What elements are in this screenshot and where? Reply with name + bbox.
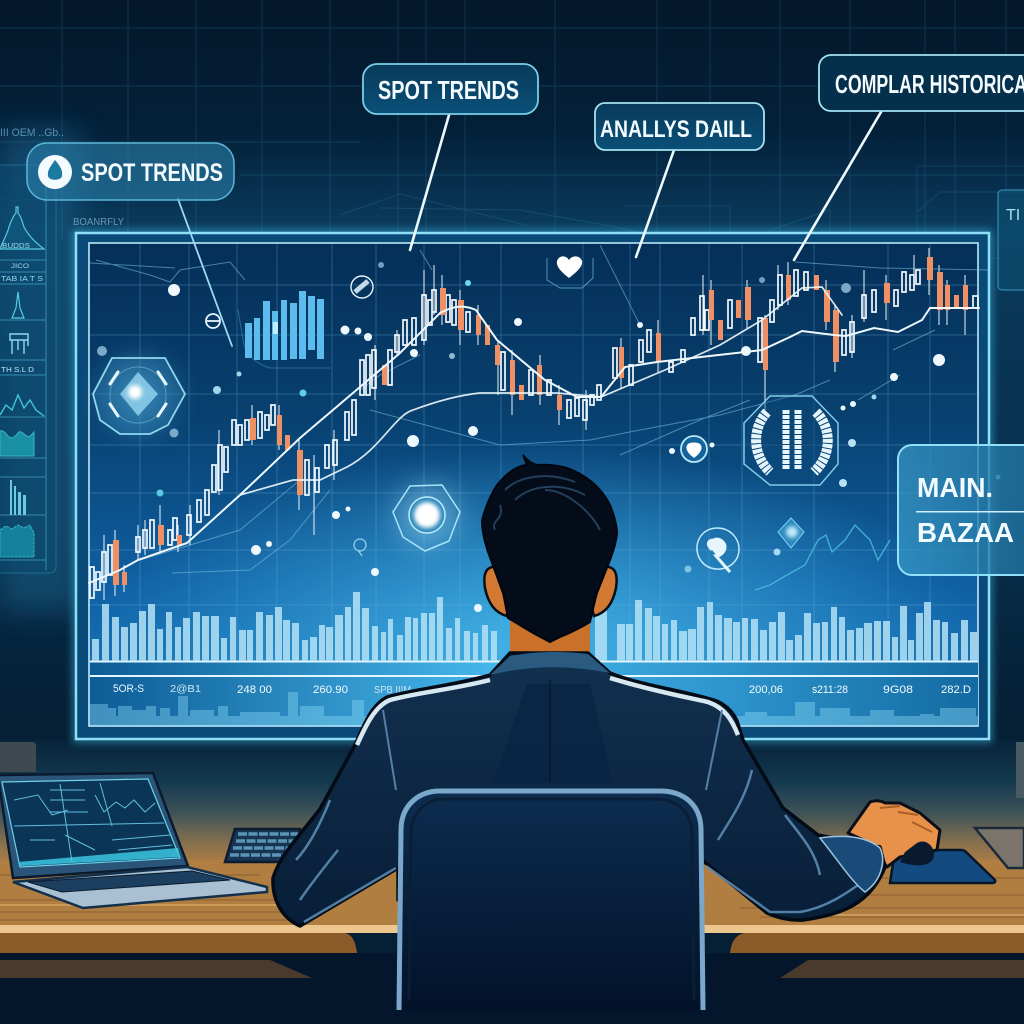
pixel activity blocks (90, 692, 978, 726)
sleeve seams (383, 710, 722, 790)
panel: left side data column (0, 165, 56, 573)
sleeve highlights (296, 770, 872, 922)
wall fixture left (0, 742, 36, 772)
person: neck and ears (484, 567, 617, 660)
axis rules (90, 662, 978, 676)
callout text: SPOT TRENDS (378, 75, 519, 105)
icon: large hexagon emblem (93, 358, 185, 434)
icon: small chain marker (354, 539, 366, 556)
laptop base (13, 867, 267, 908)
icon: laptop (0, 773, 267, 908)
chart grid (89, 243, 978, 661)
person: chair back (398, 789, 704, 1010)
axis label: SPB IIIM (374, 685, 411, 696)
chart: secondary thin indicator lines (90, 245, 990, 573)
person: hand on mouse (848, 801, 940, 867)
label: top-left caption: III OEM ..Gb.. (0, 127, 64, 139)
callout: analysis daily (595, 103, 764, 150)
icon: mini bar chart (10, 480, 26, 515)
wall below the screen (0, 740, 1024, 861)
lower trend line (240, 287, 842, 495)
icon: glowing pin (778, 518, 804, 548)
area below desk (0, 953, 1024, 1024)
chair outer rim (399, 791, 703, 1010)
axis label: 9G08 (883, 684, 913, 696)
callout text: MAIN. (917, 472, 993, 503)
icon: glowing octagon (393, 485, 460, 551)
tag text: TI (1006, 207, 1020, 224)
icon: ornate teal chart (0, 525, 34, 557)
outer frame (76, 233, 989, 739)
panel: main trading screen (76, 233, 989, 739)
icon: desk keyboard (225, 829, 300, 862)
icon: spire (12, 292, 24, 318)
bar chart: mini blue bars (238, 291, 330, 368)
laptop screen bar (18, 848, 180, 866)
left wall glow (0, 130, 80, 610)
jacket centre panel (493, 684, 613, 783)
label: side value: TH S.L D (1, 367, 34, 374)
label: column row: TAB IA T S (1, 276, 43, 283)
icon: temple base label: BUDDS (2, 243, 30, 250)
chart: white candles (90, 270, 978, 598)
callout text: ANALLYS DAILL (600, 116, 752, 143)
background grid lines (0, 0, 1024, 270)
label: column heading: JICO (11, 263, 29, 270)
inner frame (89, 243, 978, 726)
axis label: s211:28 (812, 684, 848, 696)
lower desk rail left (0, 960, 312, 978)
axis label: 260.90 (313, 684, 348, 696)
hand fingers (880, 806, 932, 832)
callout: spot trends (363, 64, 538, 114)
icon: small badge (351, 276, 373, 298)
label: board caption: BOANRFLY (73, 217, 124, 228)
collar (490, 652, 610, 675)
person: suit body (273, 652, 885, 926)
panel: axis band (90, 662, 978, 726)
screen frame glow (76, 233, 989, 739)
arrow: callout leaders (178, 112, 881, 346)
desk underside (0, 933, 1024, 953)
chart area glow (89, 320, 978, 726)
icon: mouse pad (890, 850, 995, 883)
icon: block building (10, 334, 28, 354)
chart area background (89, 243, 978, 726)
chart: faded teal sparkline (755, 525, 890, 590)
axis label: 248 00 (237, 684, 272, 696)
shoulder highlights (357, 678, 738, 745)
icon: small ring at top left of chart (206, 314, 220, 328)
panel: main bazaar callout (898, 445, 1024, 575)
wall fixture right (1016, 742, 1024, 798)
callout: compare historical (819, 55, 1024, 111)
icon: mountain chart (0, 395, 44, 416)
jacket back seam (549, 680, 551, 783)
axis label: 2@B1 (170, 684, 201, 695)
icon: ring with drop (681, 436, 707, 462)
mouse (900, 841, 934, 865)
left panel rules (0, 170, 46, 570)
icon: temple with statue (0, 207, 44, 249)
laptop lid (0, 773, 188, 878)
lower desk rail right (780, 960, 1024, 978)
chair inner rim (409, 799, 694, 1000)
laptop keyboard (28, 871, 230, 892)
person: hair (482, 455, 617, 642)
chart: orange candles (113, 257, 968, 585)
panel: right edge tag (998, 190, 1024, 290)
bar chart: volume (92, 592, 977, 661)
desk front edge (0, 925, 1024, 933)
icon: drop in white circle (38, 155, 72, 189)
icon: heart (547, 256, 593, 288)
callout text: SPOT TRENDS (81, 159, 223, 187)
icon: paper on desk (975, 828, 1024, 868)
callout: spot trends with icon (27, 143, 234, 200)
chart: data dots (97, 262, 1000, 612)
axis label: 200,06 (749, 684, 783, 696)
jacket cuff (820, 836, 883, 892)
laptop screen data (14, 783, 172, 862)
screen fill (76, 233, 989, 739)
divider (916, 511, 1024, 512)
desk surface (0, 860, 1024, 1024)
icon: pixel code octagon (744, 396, 838, 485)
icon: wave chart (0, 431, 34, 456)
upper trend line (89, 307, 979, 583)
axis label: 5OR-S (113, 683, 144, 695)
laptop screen (2, 779, 180, 867)
axis label: 282.D (941, 684, 971, 696)
callout text: BAZAA (917, 517, 1014, 548)
chart: candlestick wicks (104, 248, 965, 600)
chart: moving average lines (89, 287, 979, 583)
icon: ring with heart magnifier (697, 528, 739, 572)
